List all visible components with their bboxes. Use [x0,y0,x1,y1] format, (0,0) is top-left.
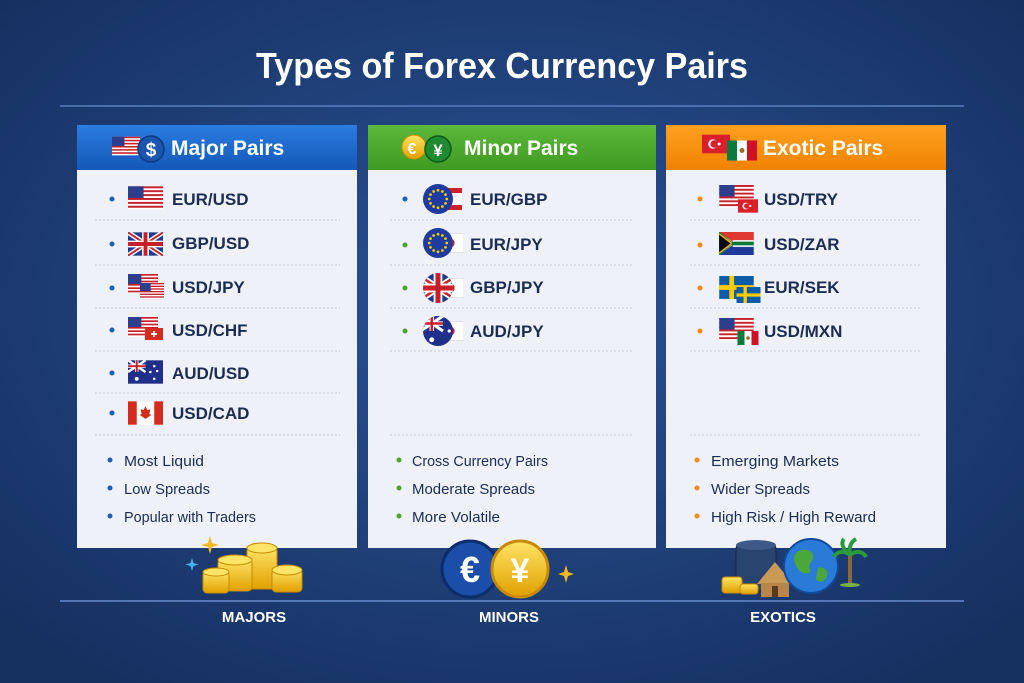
features: minor: Moderate Spreads [412,481,535,498]
panel: exotic pairs [666,125,946,548]
list: major pairs [110,186,249,425]
label: exotics: EXOTICS [750,609,816,626]
header: minor pairs [368,125,656,170]
header: exotic pairs [666,125,946,170]
header: major pairs: Major Pairs [171,137,284,160]
features: major [108,453,256,526]
features: exotic: High Risk / High Reward [711,509,876,526]
list: exotic pairs: EUR/SEK [764,278,840,297]
header: minor pairs: Minor Pairs [464,137,578,160]
icon: euro and yen coins: € [460,549,480,590]
features: exotic [694,453,876,526]
icon: gold coin stacks [186,536,302,593]
list: exotic pairs: USD/ZAR [764,235,840,254]
header: major pairs [77,125,357,170]
list: minor pairs: GBP/JPY [470,278,544,297]
features: major: Most Liquid [124,453,204,470]
list: exotic pairs [698,185,842,345]
list: major pairs: GBP/USD [172,234,249,253]
header: minor pairs: ¥ [433,141,443,160]
features: major: Popular with Traders [124,509,256,526]
icon: euro and yen coins: ¥ [511,552,530,590]
title: Types of Forex Currency Pairs [256,45,748,86]
panel: major pairs [77,125,357,548]
features: major: Low Spreads [124,481,210,498]
list: minor pairs: EUR/JPY [470,235,543,254]
list: major pairs: USD/JPY [172,278,245,297]
panel: minor pairs [368,125,656,548]
list: major pairs: USD/CHF [172,321,248,340]
list: minor pairs: EUR/GBP [470,190,547,209]
header: exotic pairs: Exotic Pairs [763,137,883,160]
list: major pairs: EUR/USD [172,190,249,209]
list: exotic pairs: USD/MXN [764,322,842,341]
label: minors: MINORS [479,609,539,626]
header: minor pairs: € [408,141,417,158]
header: major pairs: $ [146,140,157,161]
features: minor: Cross Currency Pairs [412,453,548,470]
features: exotic: Emerging Markets [711,453,839,470]
features: minor [396,453,548,526]
list: exotic pairs: USD/TRY [764,190,839,209]
list: major pairs: AUD/USD [172,364,249,383]
icon: euro and yen coins [442,541,574,597]
label: majors: MAJORS [222,609,286,626]
list: major pairs: USD/CAD [172,404,249,423]
icon: exotic landmarks [722,539,866,597]
list: minor pairs [402,184,547,346]
list: minor pairs: AUD/JPY [470,322,544,341]
features: exotic: Wider Spreads [711,481,810,498]
features: minor: More Volatile [412,509,500,526]
